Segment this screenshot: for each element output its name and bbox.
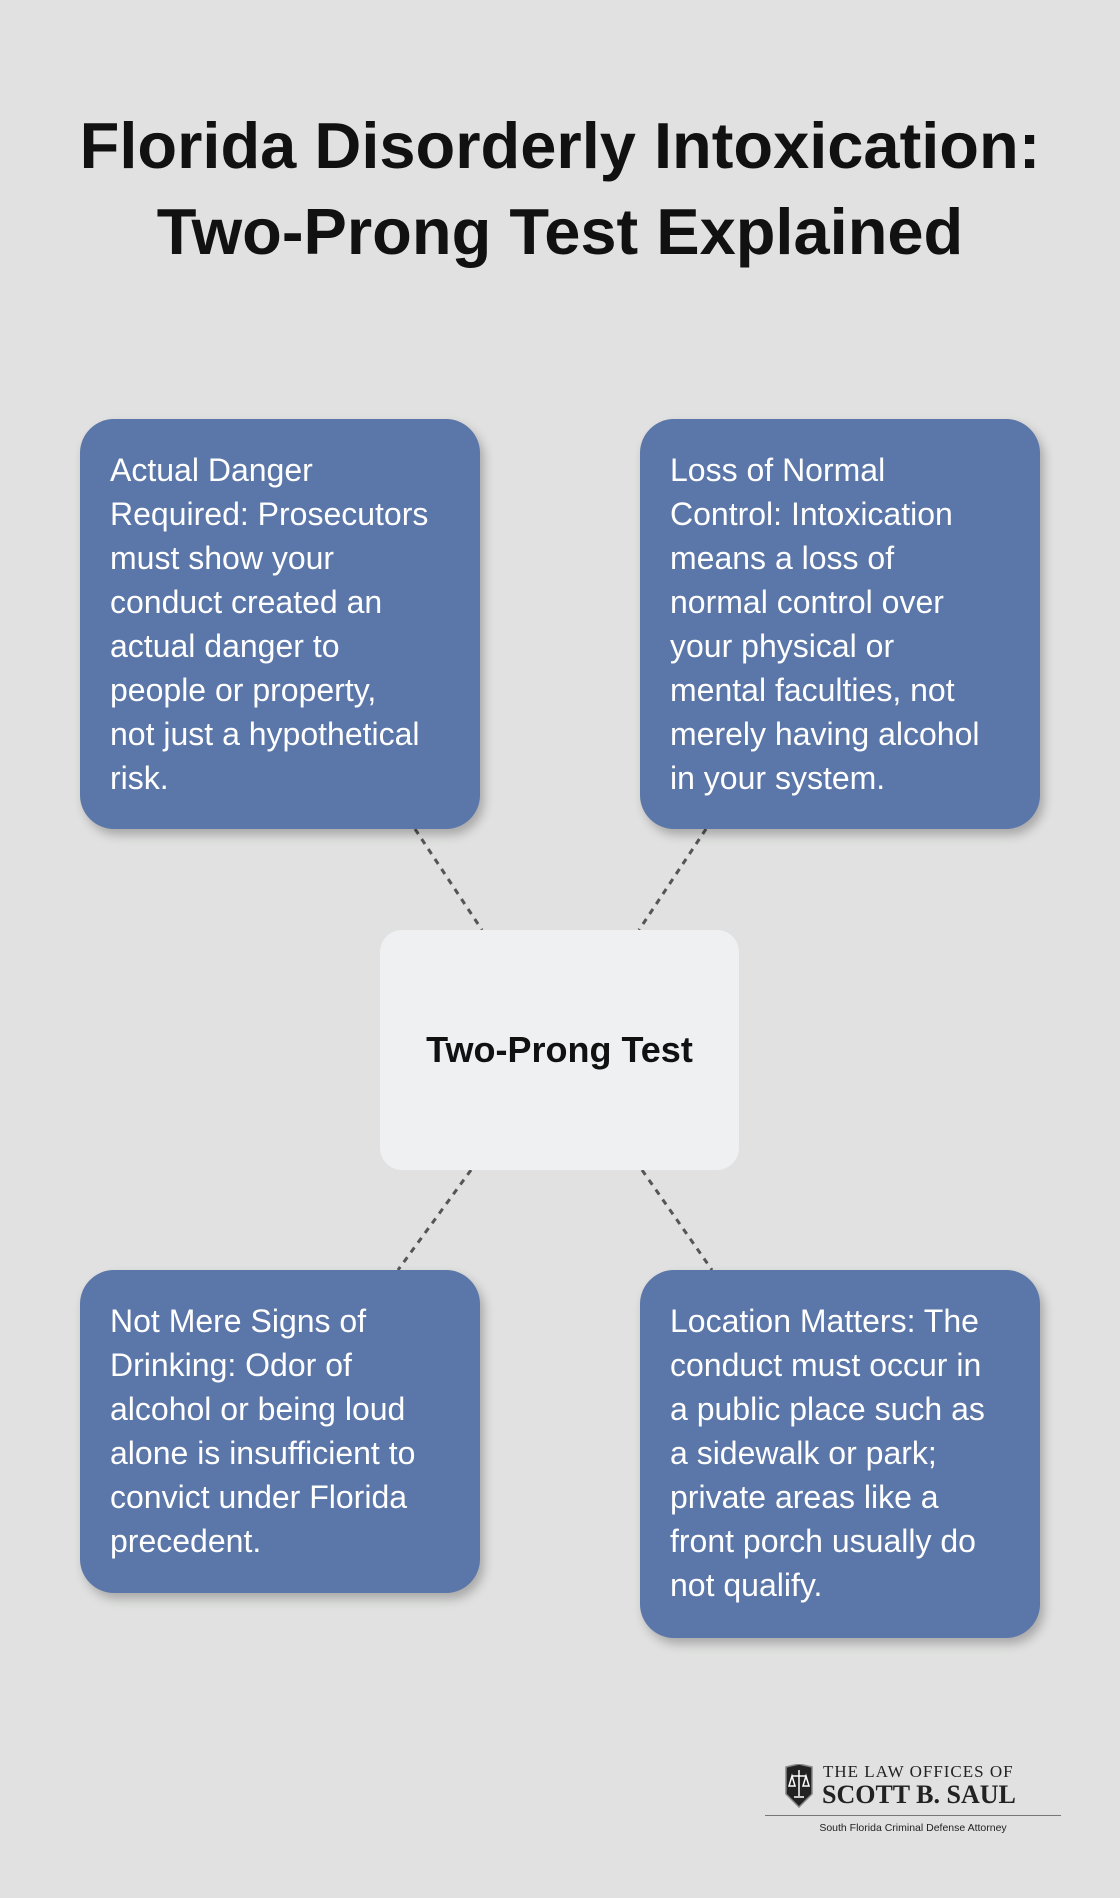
panel: location matters [640,1270,1040,1638]
center node: Two-Prong Test [426,1029,693,1070]
panel: not mere signs [80,1270,480,1593]
panel: not mere signs: convict under Florida [110,1479,407,1515]
logo: South Florida Criminal Defense Attorney [819,1822,1007,1834]
panel: location matters: private areas like a [670,1479,939,1515]
panel: loss of control [640,419,1040,829]
panel: loss of control: your physical or [670,628,894,664]
panel: loss of control: Loss of Normal [670,452,885,488]
title [80,109,1040,268]
center node [380,930,739,1170]
panel: loss of control: normal control over [670,584,944,620]
panel: loss of control: Control: Intoxication [670,496,953,532]
panel: location matters: conduct must occur in [670,1347,981,1383]
title: Two-Prong Test Explained [157,195,963,268]
panel: location matters: Location Matters: The [670,1303,979,1339]
panel: actual danger: people or property, [110,672,376,708]
panel: not mere signs: Drinking: Odor of [110,1347,352,1383]
panel: not mere signs: Not Mere Signs of [110,1303,366,1339]
panel: location matters: a public place such as [670,1391,985,1427]
panel: loss of control: merely having alcohol [670,716,980,752]
panel: not mere signs: alcohol or being loud [110,1391,405,1427]
panel: actual danger: Actual Danger [110,452,313,488]
panel: location matters: front porch usually do [670,1523,976,1559]
panel: not mere signs: alone is insufficient to [110,1435,415,1471]
panel: actual danger [80,419,480,829]
panel: actual danger: not just a hypothetical [110,716,420,752]
panel: not mere signs: precedent. [110,1523,261,1559]
panel: actual danger: must show your [110,540,334,576]
logo [765,1762,1061,1834]
panel: actual danger: actual danger to [110,628,340,664]
panel: loss of control: mental faculties, not [670,672,955,708]
panel: location matters: a sidewalk or park; [670,1435,937,1471]
panel: location matters: not qualify. [670,1567,822,1603]
panel: actual danger: Required: Prosecutors [110,496,428,532]
panel: loss of control: means a loss of [670,540,894,576]
icon: shield [785,1764,813,1808]
panel: actual danger: conduct created an [110,584,382,620]
panel: loss of control: in your system. [670,760,885,796]
panel: actual danger: risk. [110,760,169,796]
logo: SCOTT B. SAUL [822,1780,1016,1809]
logo: THE LAW OFFICES OF [823,1762,1014,1781]
title: Florida Disorderly Intoxication: [80,109,1040,182]
